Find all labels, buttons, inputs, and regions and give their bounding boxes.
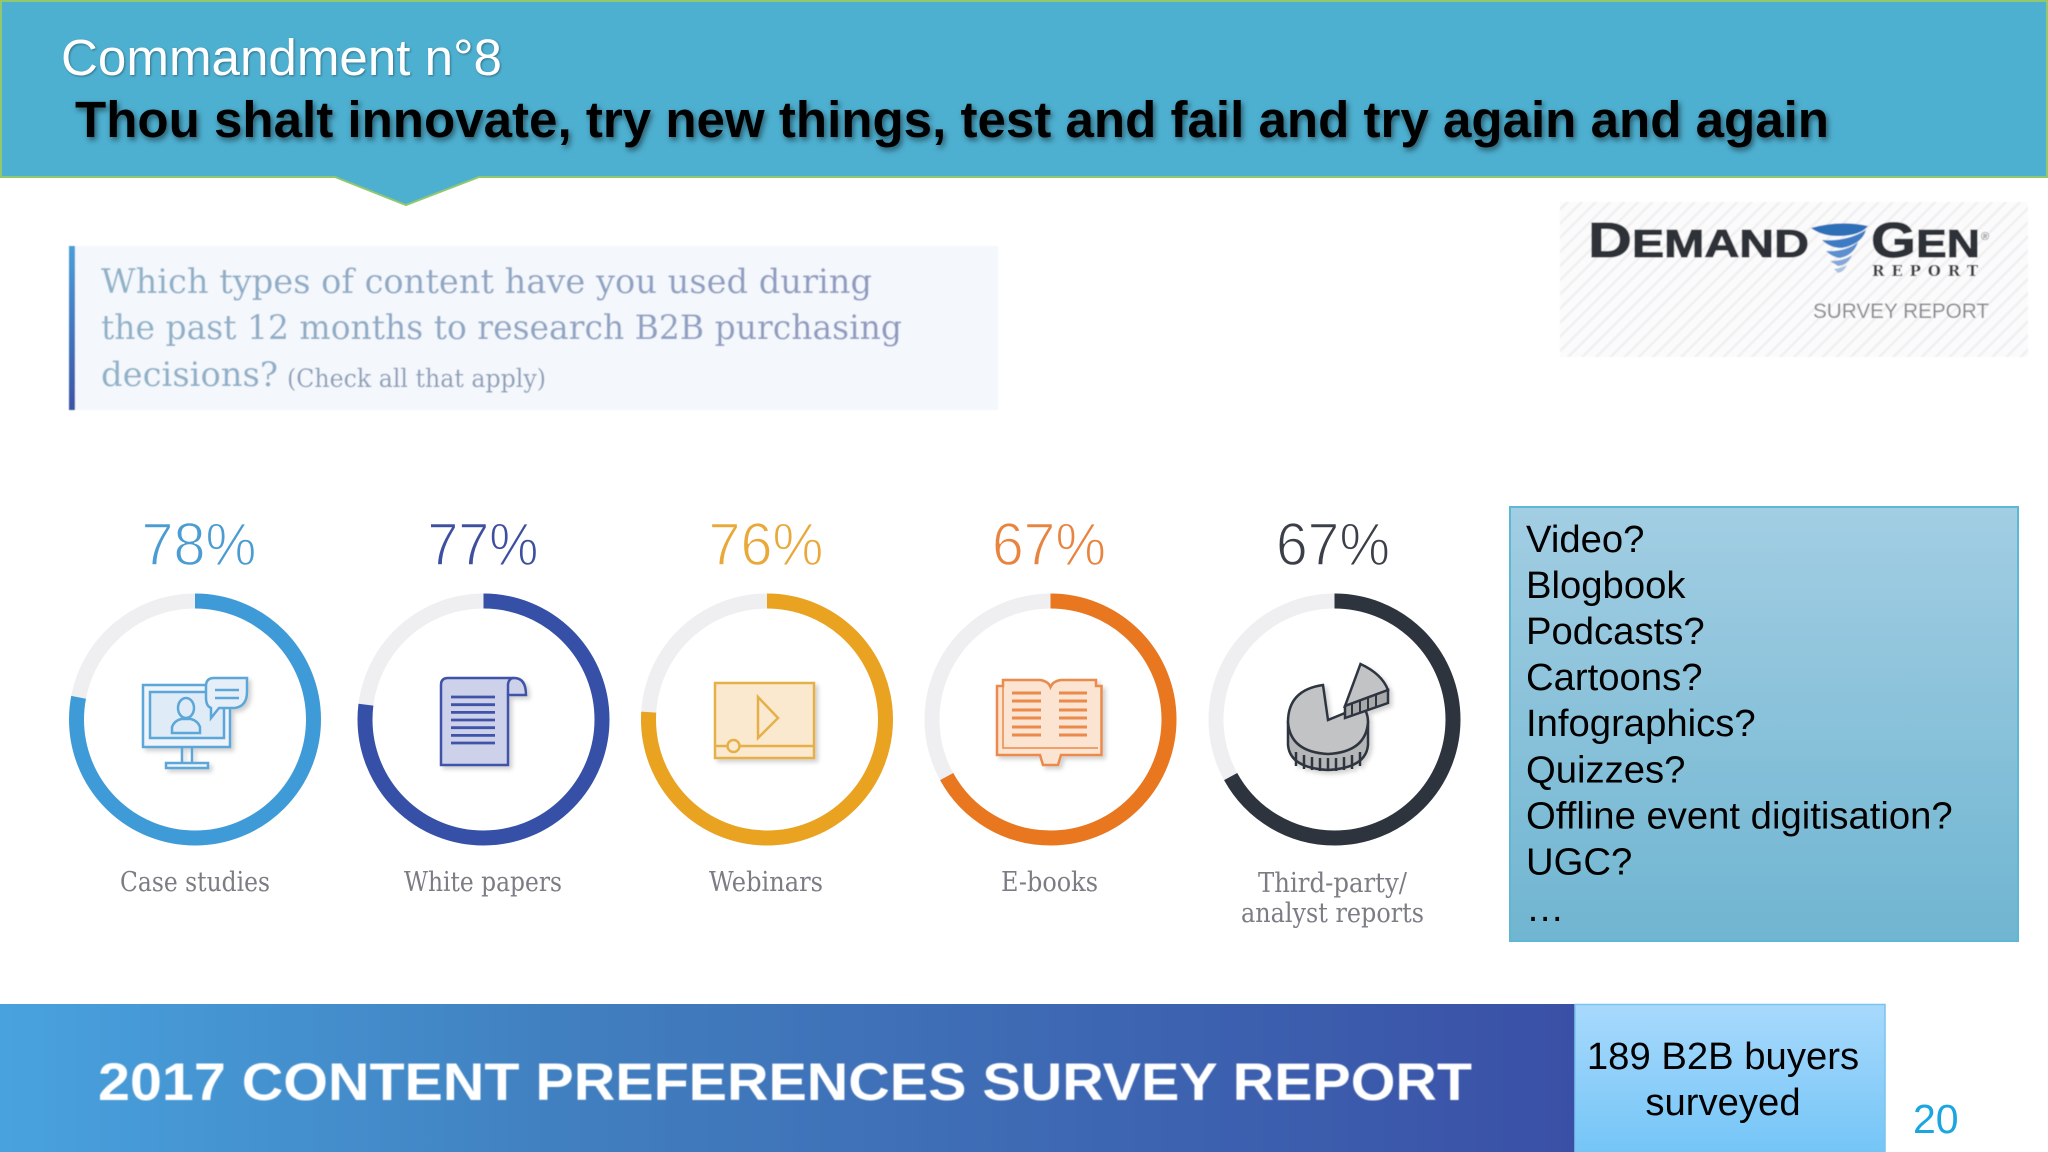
label: Case studies (120, 867, 270, 898)
heading: commandment number: Commandment n°8 (61, 29, 502, 86)
ring (932, 601, 1169, 838)
question text (101, 262, 902, 395)
icon: monitor with presenter (143, 678, 247, 768)
heading: commandment statement: Thou shalt innovate, try new things, test and fail and try again and again (75, 91, 1829, 148)
icon: open book (997, 680, 1102, 765)
banner shape with notch (1, 1, 2047, 205)
label: analyst reports (1241, 898, 1424, 929)
label (1241, 868, 1424, 929)
panel background (1510, 507, 2018, 941)
header banner (1, 1, 2047, 205)
ring (648, 601, 886, 838)
question text: Which types of content have you used during (101, 262, 872, 302)
question accent bar (69, 246, 75, 410)
hatched logo background (1560, 202, 2028, 357)
ring (76, 601, 314, 838)
question text: decisions? (101, 355, 278, 395)
report title: 2017 CONTENT PREFERENCES SURVEY REPORT (98, 1053, 1472, 1112)
question text: (Check all that apply) (287, 364, 546, 393)
content list: Offline event digitisation? (1526, 794, 1953, 838)
callout text: surveyed (1645, 1081, 1801, 1124)
question background (75, 246, 998, 410)
ring (1216, 601, 1453, 838)
wordmark: Report: REPORT (1872, 262, 1979, 280)
callout background (1575, 1004, 1885, 1152)
panel: other content ideas (1510, 507, 2018, 941)
gradient band (0, 1004, 1575, 1152)
label: E-books (1001, 867, 1098, 898)
ring (365, 601, 602, 838)
percent: 67% (1276, 511, 1390, 578)
icon: document (441, 678, 526, 765)
label: survey report: SURVEY REPORT (1813, 300, 1989, 323)
donut: e-books 67% (932, 511, 1169, 898)
icon: pie chart with slice (1288, 664, 1388, 771)
donut: case studies 78% (76, 511, 314, 898)
content list: Blogbook (1526, 564, 1686, 607)
donut: webinars 76% (648, 511, 886, 898)
content list: … (1526, 887, 1564, 930)
content list: Podcasts? (1526, 610, 1705, 653)
wordmark: Gen: GEN (1871, 214, 1980, 268)
wordmark: Demand: DEMAND (1588, 214, 1809, 268)
content list (1526, 518, 1953, 930)
donut: white papers 77% (365, 511, 602, 898)
percent: 78% (142, 511, 256, 578)
logo: Demand Gen Report (1560, 202, 2028, 357)
label: Third-party/ (1258, 868, 1408, 899)
question text: the past 12 months to research B2B purchasing (101, 308, 902, 348)
registered mark: ® (1981, 231, 1989, 243)
percent: 67% (992, 511, 1106, 578)
page number: 20 (1913, 1096, 1959, 1142)
content list: Quizzes? (1526, 748, 1685, 792)
callout text (1587, 1035, 1859, 1124)
content list: Video? (1526, 518, 1644, 561)
percent: 76% (708, 511, 824, 578)
content list: Cartoons? (1526, 656, 1702, 699)
panel: survey question (69, 246, 998, 410)
footer banner: report title (0, 1004, 1575, 1152)
label: Webinars (709, 867, 823, 898)
donut: third-party analyst reports 67% (1216, 511, 1453, 929)
callout text: 189 B2B buyers (1587, 1035, 1859, 1078)
icon: video player (715, 683, 814, 758)
content list: Infographics? (1526, 702, 1756, 745)
label: White papers (404, 867, 562, 898)
content list: UGC? (1526, 840, 1632, 884)
callout: sample size (1575, 1004, 1885, 1152)
percent: 77% (428, 511, 538, 578)
icon: tornado (1811, 223, 1868, 273)
